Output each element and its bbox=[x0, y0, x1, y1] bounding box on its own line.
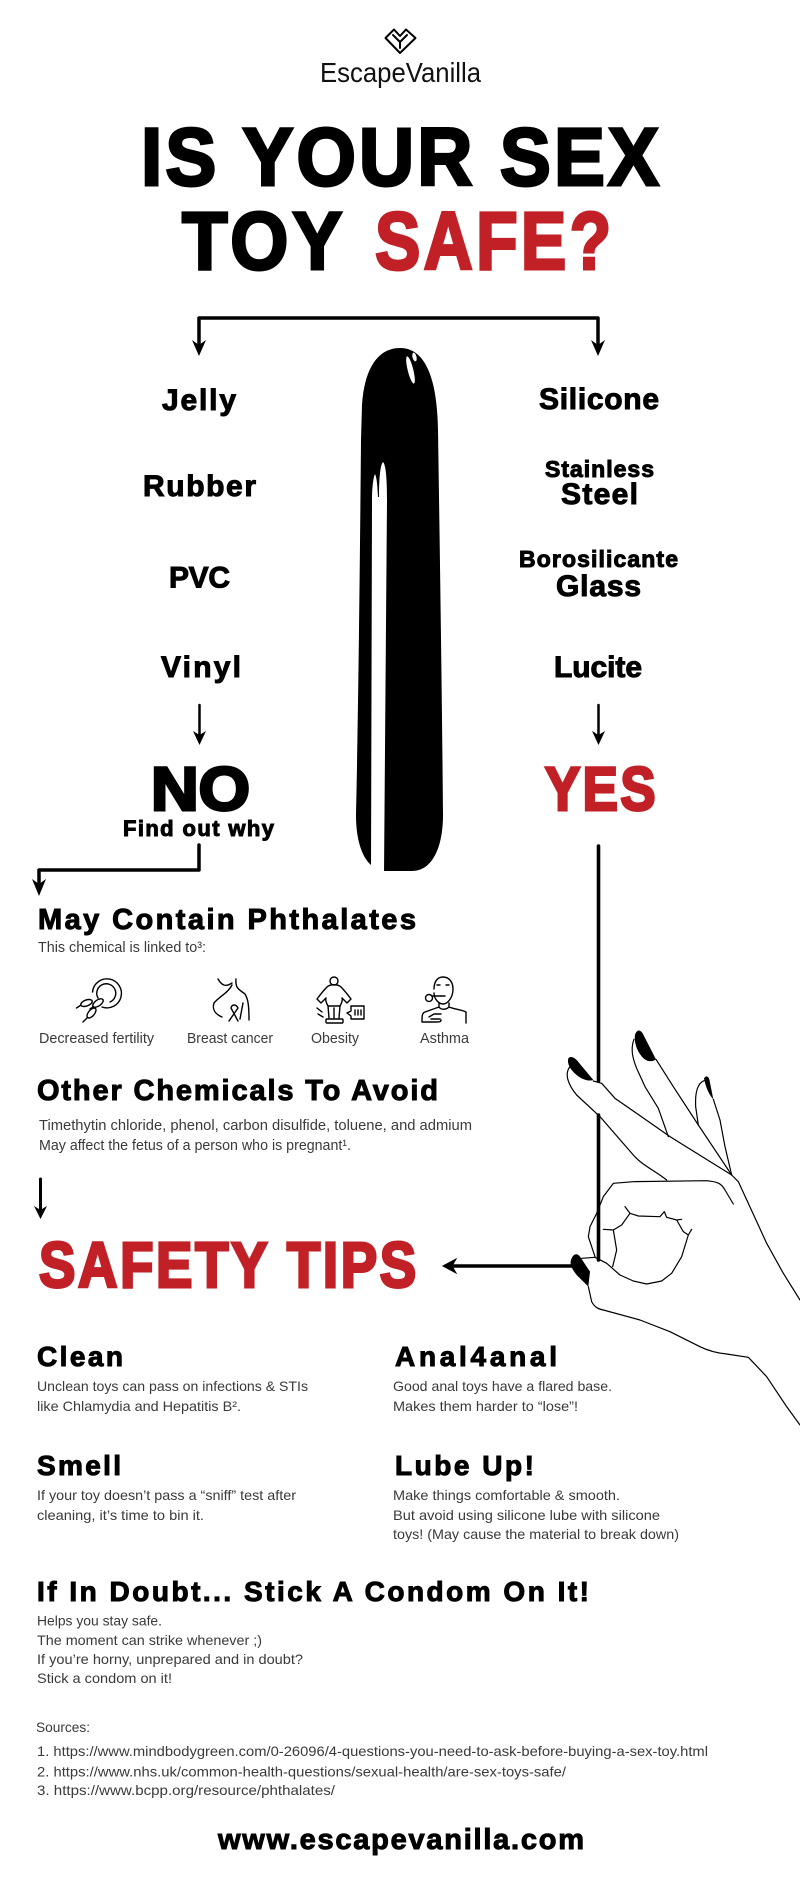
tip: smell: cleaning, it’s time to bin it. bbox=[37, 1507, 204, 1523]
column: safe materials: Stainless bbox=[545, 456, 654, 482]
tip: lube up: Lube Up! bbox=[395, 1450, 534, 1481]
label: Breast cancer bbox=[187, 1030, 273, 1047]
column: safe materials: Glass bbox=[556, 570, 641, 603]
icon: decreased fertility bbox=[76, 979, 121, 1022]
text: linked to: This chemical is linked to³: bbox=[38, 939, 206, 956]
label: Decreased fertility bbox=[39, 1030, 154, 1047]
health effects icons bbox=[39, 977, 470, 1047]
tip: smell: If your toy doesn’t pass a “sniff” test after bbox=[37, 1487, 296, 1503]
hand illustration bbox=[567, 1031, 800, 1425]
column: unsafe materials: Vinyl bbox=[161, 651, 241, 684]
verdict: NO: NO bbox=[151, 755, 250, 823]
tip: condom bbox=[37, 1576, 589, 1686]
arrow: left to safety tips bbox=[443, 1259, 575, 1273]
tip: condom: Helps you stay safe. bbox=[37, 1612, 162, 1628]
column: safe materials: Borosilicante bbox=[519, 546, 678, 572]
highlight on tip bbox=[404, 352, 418, 384]
column: unsafe materials bbox=[143, 384, 256, 684]
sources: 2. https://www.nhs.uk/common-health-questions/sexual-health/are-sex-toys-safe/ bbox=[37, 1764, 566, 1780]
arrow: down to NO bbox=[193, 705, 206, 745]
heading: safety tips: SAFETY TIPS bbox=[39, 1229, 416, 1301]
text: other chemicals detail bbox=[39, 1117, 472, 1154]
title: IS YOUR SEX bbox=[141, 112, 659, 203]
column: unsafe materials: PVC bbox=[169, 562, 230, 594]
column: unsafe materials: Jelly bbox=[162, 384, 236, 417]
tip: lube up bbox=[393, 1450, 679, 1542]
arrow: from find out why to phthalates bbox=[32, 845, 199, 896]
sources: 3. https://www.bcpp.org/resource/phthalates/ bbox=[37, 1782, 335, 1798]
tip: lube up: But avoid using silicone lube with silicone bbox=[393, 1507, 660, 1523]
sources bbox=[36, 1719, 708, 1798]
icon: obesity on scale bbox=[317, 977, 364, 1023]
label: Asthma bbox=[420, 1030, 470, 1047]
tip: anal4anal: Makes them harder to “lose”! bbox=[393, 1398, 578, 1414]
icon: breast cancer bbox=[213, 979, 249, 1021]
tip: clean: Clean bbox=[37, 1341, 123, 1372]
arrow: vertical pole from YES bbox=[597, 846, 600, 1260]
tip: condom: If you’re horny, unprepared and in doubt? bbox=[37, 1651, 303, 1667]
arrow: bracket splitting to both columns bbox=[192, 318, 605, 356]
tip: clean bbox=[37, 1341, 308, 1414]
heading: other chemicals: Other Chemicals To Avoid bbox=[37, 1075, 438, 1107]
title: SAFE? bbox=[375, 195, 611, 286]
verdict: YES: YES bbox=[545, 757, 656, 824]
tip: condom: If In Doubt... Stick A Condom On It! bbox=[37, 1576, 589, 1607]
column: safe materials bbox=[519, 383, 678, 684]
toy illustration bbox=[356, 348, 443, 875]
column: unsafe materials: Rubber bbox=[143, 470, 256, 503]
tip: smell: Smell bbox=[37, 1450, 121, 1481]
tip: clean: Unclean toys can pass on infections & STIs bbox=[37, 1378, 308, 1394]
sources: Sources: bbox=[36, 1719, 90, 1735]
title: TOY bbox=[182, 195, 342, 287]
column: safe materials: Steel bbox=[561, 478, 638, 511]
arrow: down to safety tips bbox=[34, 1179, 47, 1219]
tip: anal4anal: Anal4anal bbox=[395, 1341, 557, 1372]
arrow: down to YES bbox=[592, 705, 605, 745]
tip: lube up: toys! (May cause the material to break down) bbox=[393, 1526, 679, 1542]
icon: heart diamond logo mark bbox=[386, 30, 416, 53]
tip: anal4anal bbox=[393, 1341, 612, 1414]
tip: anal4anal: Good anal toys have a flared base. bbox=[393, 1378, 612, 1394]
tip: clean: like Chlamydia and Hepatitis B². bbox=[37, 1398, 241, 1414]
text: other chemicals detail: Timethytin chloride, phenol, carbon disulfide, toluene, and admium bbox=[39, 1117, 472, 1134]
logo bbox=[320, 30, 481, 88]
logo wordmark: EscapeVanilla bbox=[320, 57, 481, 88]
glossy strip bbox=[371, 462, 387, 875]
label: Obesity bbox=[311, 1030, 359, 1047]
tip: lube up: Make things comfortable & smooth. bbox=[393, 1487, 620, 1503]
text: other chemicals detail: May affect the fetus of a person who is pregnant¹. bbox=[39, 1137, 351, 1154]
column: safe materials: Lucite bbox=[554, 651, 642, 684]
nails bbox=[568, 1031, 713, 1287]
link: find out why: Find out why bbox=[123, 816, 275, 841]
icon: asthma bbox=[422, 977, 466, 1023]
tip: smell bbox=[37, 1450, 296, 1523]
column: safe materials: Silicone bbox=[539, 383, 659, 416]
sources: 1. https://www.mindbodygreen.com/0-26096/4-questions-you-need-to-ask-before-buying-a-sex-toy.html bbox=[37, 1743, 708, 1759]
tip: condom: The moment can strike whenever ;) bbox=[37, 1632, 262, 1648]
title bbox=[141, 112, 659, 287]
website url: www.escapevanilla.com bbox=[217, 1824, 584, 1856]
tip: condom: Stick a condom on it! bbox=[37, 1670, 172, 1686]
heading: may contain phthalates: May Contain Phthalates bbox=[38, 904, 416, 936]
